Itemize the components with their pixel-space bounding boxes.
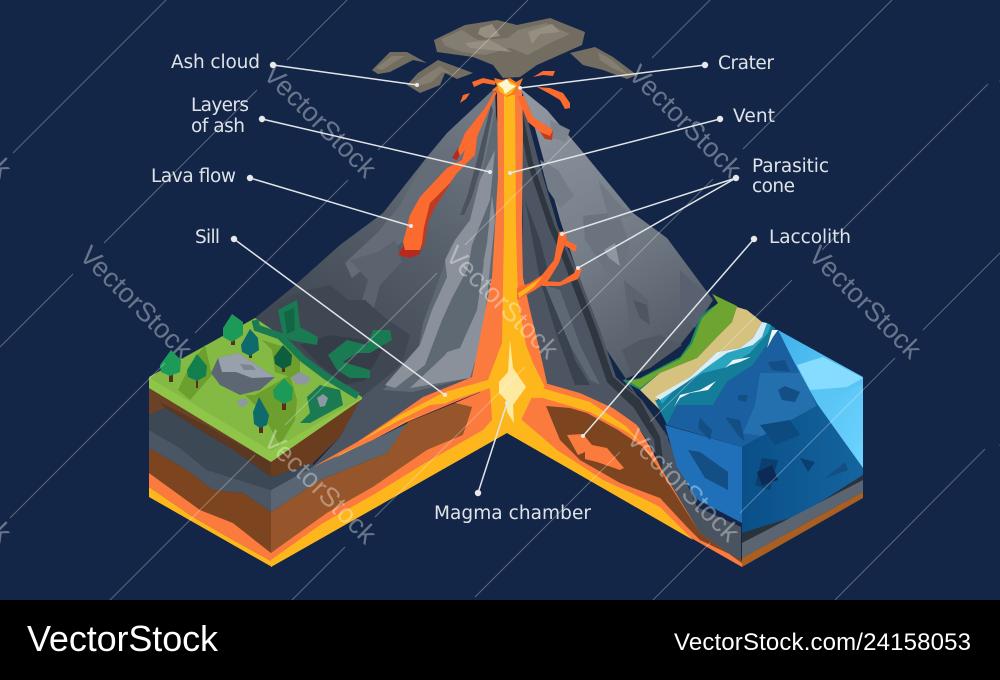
footer band — [0, 600, 1000, 680]
right crust and laccolith — [507, 380, 742, 567]
label: laccolith — [581, 227, 851, 438]
lava flow — [398, 92, 497, 258]
label: sill: Sill — [195, 227, 220, 248]
label: sill — [195, 227, 447, 397]
label: parasitic cone — [560, 156, 829, 270]
label: crater — [518, 53, 774, 90]
label: vent: Vent — [733, 106, 775, 127]
ocean cube — [655, 322, 863, 567]
crater — [492, 78, 523, 97]
watermark text: VectorStock — [623, 59, 748, 184]
watermark text: VectorStock — [440, 240, 565, 365]
label: layers of ash: Layers — [191, 95, 249, 116]
label: lava flow — [151, 166, 413, 228]
label: crater: Crater — [718, 53, 774, 74]
label: ash cloud: Ash cloud — [171, 52, 260, 73]
grass surface — [149, 318, 362, 462]
label: ash cloud — [171, 52, 419, 87]
watermark text: VectorStock — [74, 240, 199, 365]
watermark text: VectorStock — [258, 59, 383, 184]
watermark text: VectorStock — [258, 425, 383, 550]
footer band: VectorStock — [27, 618, 219, 659]
forest patches — [255, 300, 392, 423]
label: magma chamber: Magma chamber — [434, 503, 591, 524]
parasitic cones — [517, 231, 582, 300]
label: lava flow: Lava flow — [151, 166, 236, 187]
rock strata right of vent — [517, 95, 741, 563]
footer band: VectorStock.com/24158053 — [674, 629, 971, 656]
watermark text — [0, 59, 1000, 550]
label: layers of ash — [191, 95, 492, 174]
magma chamber core — [499, 340, 526, 423]
label: layers of ash: of ash — [191, 116, 245, 137]
label: magma chamber — [434, 401, 591, 524]
label: parasitic cone: cone — [752, 176, 795, 197]
mountain right flank — [520, 88, 713, 400]
beach and coast — [623, 290, 762, 412]
boulders — [211, 353, 328, 407]
trees — [160, 314, 293, 433]
laccolith — [567, 434, 624, 470]
label: parasitic cone: Parasitic — [752, 156, 829, 177]
vent and sills — [313, 90, 547, 467]
watermark text: VectorStock — [621, 423, 746, 548]
label: vent — [508, 106, 775, 175]
label: laccolith: Laccolith — [769, 227, 851, 248]
lava flow right and fountains — [460, 71, 570, 140]
ash cloud — [372, 18, 637, 93]
land block right face and magma — [271, 90, 547, 567]
mountain left flank — [255, 88, 503, 466]
watermark text: VectorStock — [803, 240, 928, 365]
land block left front face — [149, 385, 272, 567]
